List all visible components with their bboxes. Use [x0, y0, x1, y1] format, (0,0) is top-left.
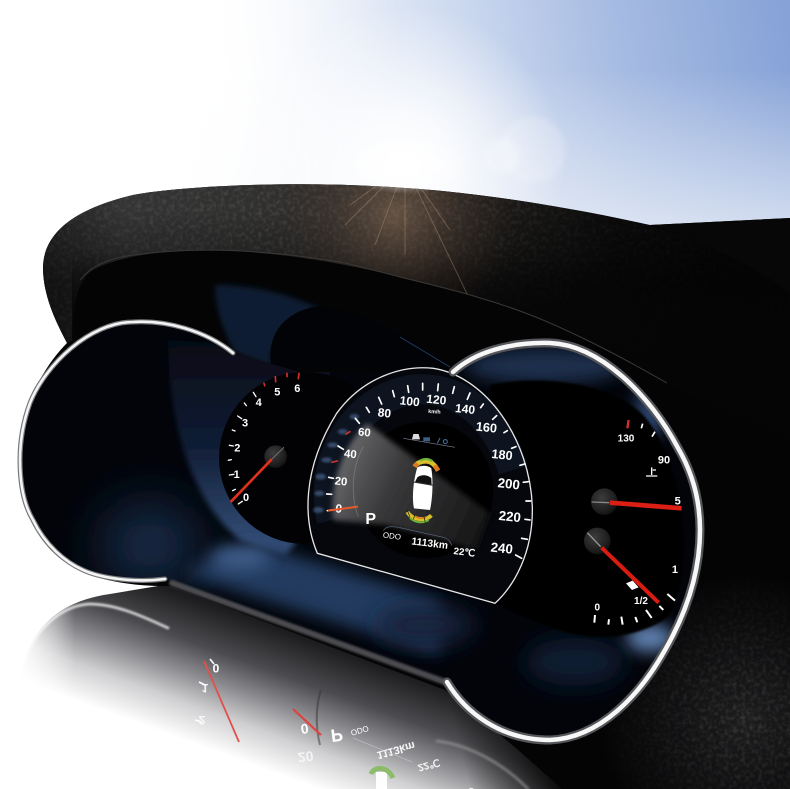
- chrome bezel ring: [20, 322, 700, 740]
- speed numbers: 140: [454, 401, 476, 417]
- fuel gauge: [584, 528, 678, 625]
- gauge outline: [308, 368, 532, 603]
- tick ring band: [329, 389, 513, 520]
- hood lower seam: [80, 250, 667, 383]
- speed numbers: [334, 392, 522, 557]
- temperature gauge: 5: [675, 496, 681, 508]
- gear indicator needle: [328, 507, 358, 511]
- lower blue band: [185, 545, 440, 655]
- dark shroud over the speedometer: [271, 306, 450, 372]
- speed numbers: 220: [498, 508, 522, 525]
- speed numbers: 160: [475, 420, 498, 436]
- right gauges dial: [490, 380, 684, 637]
- speed numbers: 80: [377, 405, 392, 421]
- lit screen wedge: [333, 423, 490, 550]
- reflected bezel: [19, 604, 528, 789]
- speed numbers: 100: [399, 393, 421, 409]
- speed numbers: 120: [426, 392, 447, 408]
- tachometer numbers: 1: [234, 469, 240, 481]
- reflected speedometer: P: [329, 724, 344, 746]
- speed unit: km/h: [428, 409, 441, 416]
- instrument cluster body and hood: [19, 165, 790, 789]
- speed numbers: 20: [334, 475, 348, 489]
- sun glare over the hood edge: [343, 140, 467, 200]
- reflected tachometer: 3: [203, 749, 210, 763]
- top right glow: [465, 348, 625, 384]
- speed numbers: 200: [497, 475, 521, 492]
- fuel gauge: 1/2: [634, 596, 648, 607]
- speed numbers: 40: [343, 448, 357, 461]
- speed ticks: [327, 383, 531, 558]
- temperature gauge: [591, 420, 682, 515]
- blue panel above the cluster: [215, 285, 345, 368]
- trip information: 22℃: [453, 546, 476, 560]
- speed numbers: 180: [491, 447, 513, 463]
- trip information: [382, 527, 476, 560]
- distant dashboard: [650, 218, 790, 293]
- fuel gauge: 0: [595, 603, 601, 614]
- gauge face: [308, 368, 532, 603]
- reflected speedometer: ODO: [350, 724, 370, 737]
- speed numbers: 240: [490, 540, 514, 557]
- left lobe glow: [100, 503, 200, 587]
- trip information: ODO: [382, 531, 402, 542]
- lower right glow: [626, 624, 674, 652]
- reflected speedometer: 22℃: [416, 756, 441, 773]
- temperature gauge: 130: [618, 433, 635, 444]
- right bezel: [447, 343, 700, 740]
- speed numbers: 0: [335, 501, 343, 516]
- tachometer ticks: [228, 392, 256, 504]
- parking sensor car icon: [407, 459, 438, 523]
- left bezel: [20, 322, 233, 580]
- tachometer numbers: 5: [274, 386, 280, 398]
- tachometer numbers: 2: [234, 442, 240, 454]
- speed numbers: 60: [357, 426, 371, 440]
- tachometer numbers: 6: [294, 383, 300, 395]
- reflected tachometer: 0: [213, 661, 220, 675]
- tachometer housing: [168, 340, 330, 556]
- left tachometer dial: [219, 372, 391, 544]
- reflected tachometer: 1: [202, 681, 209, 695]
- tachometer numbers: 0: [243, 492, 249, 504]
- reflected tachometer: 2: [199, 713, 206, 727]
- reflected speedometer: 1113km: [375, 739, 417, 761]
- reflection on the glossy surface: [0, 584, 590, 789]
- tachometer needle: [231, 459, 272, 502]
- leather hood: [43, 184, 657, 343]
- fuel gauge: 1: [672, 564, 678, 576]
- tachometer hub: [264, 445, 287, 468]
- tachometer numbers: 4: [256, 397, 263, 409]
- reflected speedometer: 20: [297, 748, 315, 766]
- lower bezel edge: [172, 583, 445, 682]
- gear indicator: P: [365, 511, 376, 528]
- blue tick glows: [313, 414, 359, 513]
- reflected tachometer: [195, 659, 239, 763]
- dark leather lower right: [622, 594, 790, 789]
- screen background: [357, 422, 493, 558]
- centre speedometer: [308, 368, 532, 603]
- temperature gauge: 90: [658, 454, 670, 466]
- tachometer numbers: [234, 383, 300, 504]
- tachometer numbers: 3: [242, 418, 248, 430]
- reflected speedometer: [293, 690, 478, 789]
- trip information: 1113km: [411, 536, 449, 552]
- status icons: [403, 434, 455, 447]
- cluster recess with blue lighting: [68, 338, 675, 703]
- reflected speedometer: 0: [300, 720, 310, 737]
